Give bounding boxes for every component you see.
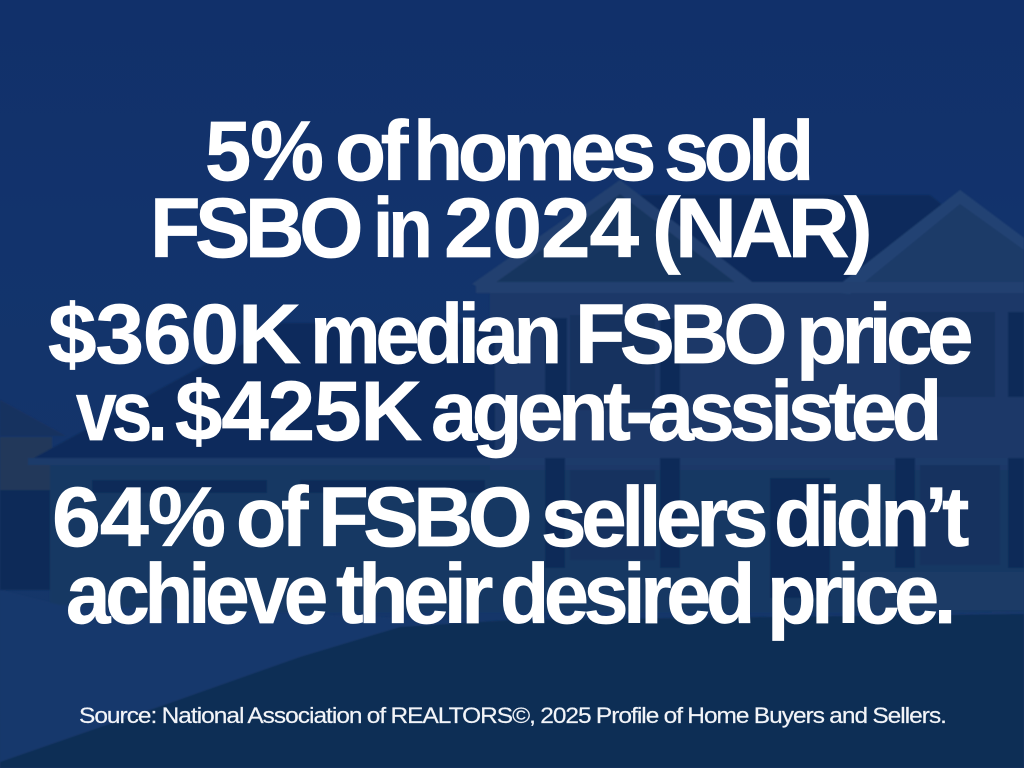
ground and drive: [0, 590, 1024, 768]
heading stat: 5% of homes sold: 2024: [444, 181, 639, 275]
stat: median price comparison: FSBO: [575, 287, 784, 381]
stat: desired price: price.: [767, 547, 951, 641]
stat: desired price: [52, 470, 968, 641]
stat: desired price: achieve: [66, 547, 326, 641]
heading stat: 5% of homes sold: [150, 104, 869, 275]
stat: desired price: desired: [500, 547, 750, 641]
heading stat: 5% of homes sold: in: [373, 181, 429, 275]
roofs: [30, 323, 495, 460]
heading stat: 5% of homes sold: sold: [664, 104, 809, 198]
stat: median price comparison: median: [310, 287, 558, 381]
stat: desired price: 64%: [52, 470, 225, 564]
lower windows and door: [545, 458, 565, 568]
heading stat: 5% of homes sold: FSBO: [150, 181, 360, 275]
heading stat: 5% of homes sold: of: [335, 104, 409, 198]
stone base: [860, 572, 1024, 610]
lawn: [0, 614, 1024, 768]
stat: desired price: their: [336, 547, 493, 641]
stat: desired price: of: [236, 470, 309, 564]
stat: median price comparison: $360K: [48, 287, 300, 381]
garage window row: [92, 480, 267, 493]
stat: desired price: didn’t: [774, 470, 968, 564]
stat: median price comparison: [48, 287, 971, 458]
heading stat: 5% of homes sold: 5%: [205, 104, 323, 198]
stat: median price comparison: price: [796, 287, 971, 381]
heading stat: 5% of homes sold: (NAR): [652, 181, 869, 275]
stat: desired price: FSBO: [318, 470, 529, 564]
stat: median price comparison: vs.: [76, 364, 163, 458]
neighbouring house left: [0, 400, 66, 436]
stat: median price comparison: $425K: [175, 364, 421, 458]
source line: Source: National Association of REALTORS©, 2025 Profile of Home Buyers and Sellers.: [79, 703, 946, 728]
stat: median price comparison: agent-assisted: [431, 364, 937, 458]
upper windows: [545, 318, 567, 413]
heading stat: 5% of homes sold: homes: [413, 104, 654, 198]
stat: desired price: sellers: [541, 470, 766, 564]
house body: [50, 465, 1024, 612]
